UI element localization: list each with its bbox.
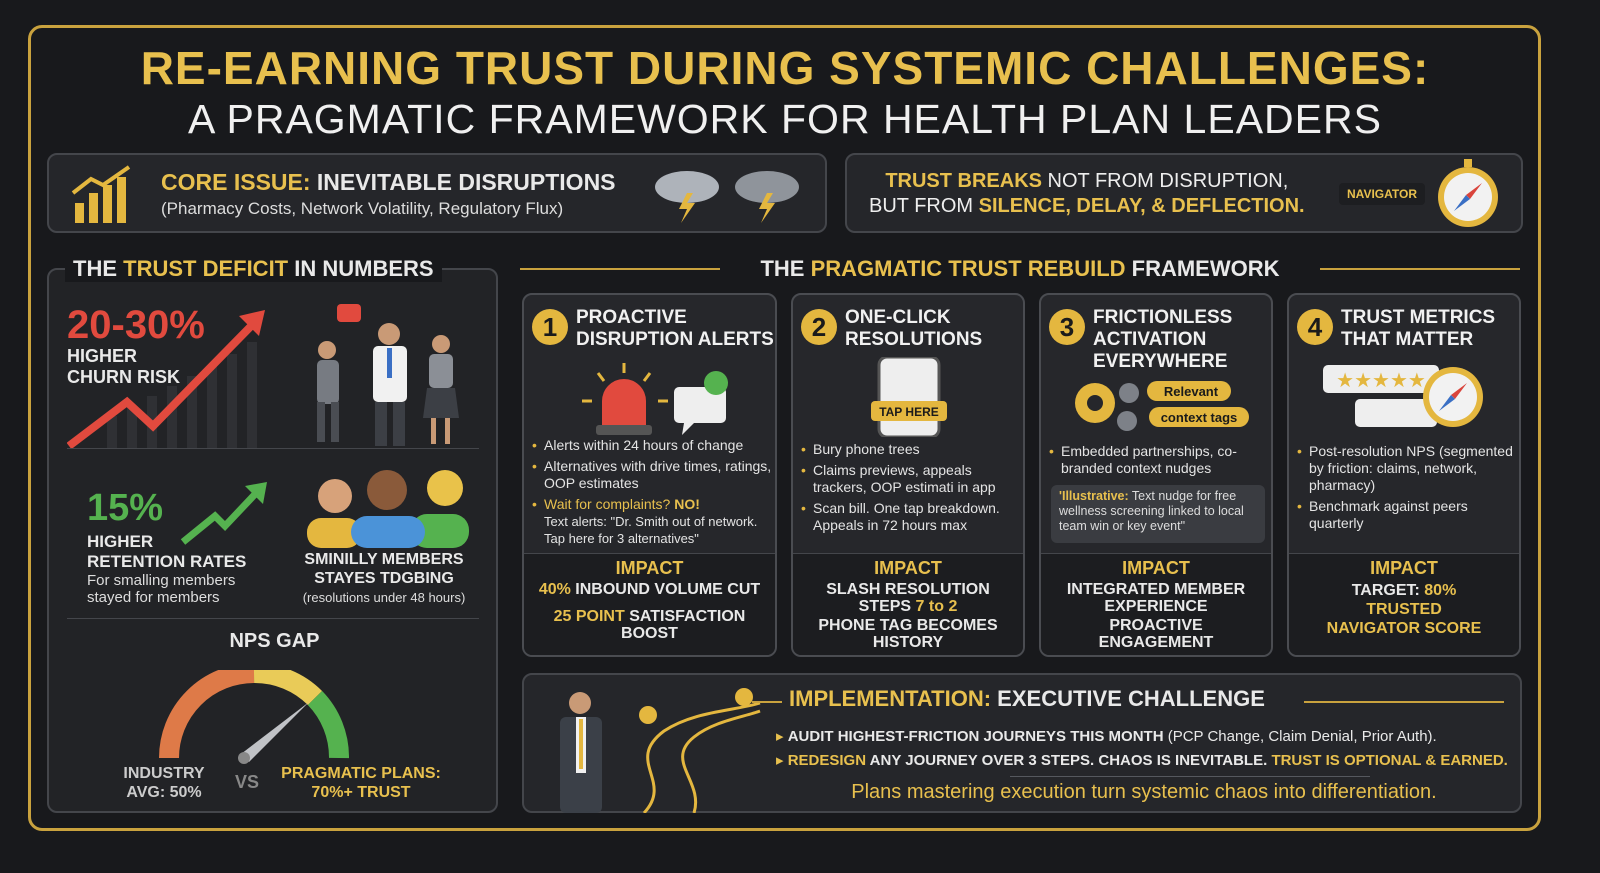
card 4: Benchmark against peers quarterly [1309,498,1468,531]
icon: gears and tags [1075,381,1249,431]
churn stat: CHURN RISK [67,367,180,387]
panel: trust breaks: NAVIGATOR [1347,187,1417,201]
icon: bar chart up [72,165,130,223]
card 3: Embedded partnerships, co-branded context nudges [1061,443,1237,476]
impact 2: SLASH RESOLUTION [826,581,990,598]
icon: executive with road [560,688,760,813]
card 1: Alternatives with drive times, ratings, OOP estimates [544,458,771,491]
impact 2 [793,553,1023,663]
retention stat [87,487,246,606]
panel: trust deficit: PRAGMATIC PLANS: [281,765,441,782]
panel: trust deficit: AVG: 50% [126,784,202,801]
card 1: DISRUPTION ALERTS [576,329,774,350]
icon: stars and compass [1323,365,1483,427]
card 2: Scan bill. One tap breakdown. Appeals in 72 hours max [813,500,1000,533]
panel: implementation: Plans mastering execution turn systemic chaos into differentiation. [851,781,1437,803]
card 2: Bury phone trees [813,441,920,457]
churn stat [67,303,205,387]
impact 4: NAVIGATOR SCORE [1327,620,1481,637]
retention stat: For smalling members [87,572,235,589]
gauge: NPS gap: NPS GAP [229,630,320,652]
churn stat: 20-30% [67,303,205,347]
icon: phone tap here [871,357,947,437]
title: A PRAGMATIC FRAMEWORK FOR HEALTH PLAN LEADERS [188,96,1382,142]
card 4: 4 [1308,312,1322,342]
panel: trust deficit: STAYES TDGBING [314,570,454,587]
impact 4: TRUSTED [1366,601,1442,618]
impact 3: ENGAGEMENT [1099,634,1213,651]
card 2: ONE-CLICK [845,307,951,328]
impact 3: INTEGRATED MEMBER [1067,581,1245,598]
impact 4: IMPACT [1370,558,1438,578]
panel: implementation: ▸ AUDIT HIGHEST-FRICTION JOURNEYS THIS MONTH (PCP Change, Claim Denial, Prior Auth). [776,728,1437,745]
heading: THE TRUST DEFICIT IN NUMBERS [73,256,434,281]
impact 3: PROACTIVE [1109,617,1203,634]
heading: framework: THE PRAGMATIC TRUST REBUILD FRAMEWORK [760,256,1280,281]
panel: trust deficit: SMINILLY MEMBERS [304,551,464,568]
retention stat: HIGHER [87,532,153,551]
icon: siren and message [582,363,728,435]
callout: illustrative [1051,485,1265,543]
card 3 [1039,293,1273,657]
impact 1: IMPACT [616,558,683,578]
card 2: RESOLUTIONS [845,329,982,350]
card 3: EVERYWHERE [1093,351,1227,372]
impact 1: BOOST [621,625,678,642]
card 1 [522,293,777,657]
impact 4: TARGET: 80% [1352,582,1456,599]
icon: gears and tags: context tags [1161,410,1237,425]
card 3: 3 [1060,312,1074,342]
card 1: Alerts within 24 hours of change [544,437,743,453]
impact 4 [1289,553,1519,663]
churn stat: HIGHER [67,346,137,366]
panel: trust deficit: 70%+ TRUST [311,784,411,801]
icon: stars and compass: ★★★★★ [1336,370,1426,392]
panel: implementation: ▸ REDESIGN ANY JOURNEY OVER 3 STEPS. CHAOS IS INEVITABLE. TRUST IS OPTIONAL & EARNED. [776,752,1508,769]
card 1: 1 [543,312,557,342]
title: RE-EARNING TRUST DURING SYSTEMIC CHALLENGES: [141,42,1429,94]
icon: people walking [317,304,459,446]
card 2 [791,293,1025,657]
impact 1: 40% INBOUND VOLUME CUT [539,581,760,598]
icon: smiling members [307,470,469,548]
impact 3 [1041,553,1271,663]
panel: trust breaks: BUT FROM SILENCE, DELAY, & DEFLECTION. [869,195,1305,217]
icon: phone tap here: TAP HERE [879,405,939,419]
impact 1 [524,553,775,663]
card 2: 2 [812,312,826,342]
card 1: Wait for complaints? NO! [544,496,700,512]
panel: trust deficit: INDUSTRY [123,765,205,782]
icon: compass [1438,159,1498,227]
impact 2: HISTORY [873,634,943,651]
callout: illustrative: 'Illustrative: Text nudge for free wellness screening linked to local team win or key event" [1059,489,1244,533]
panel: trust deficit: (resolutions under 48 hours) [303,590,465,605]
card 4 [1287,293,1521,657]
panel: core issue: CORE ISSUE: INEVITABLE DISRUPTIONS [161,169,616,195]
card 3: FRICTIONLESS [1093,307,1232,328]
retention stat: 15% [87,487,163,529]
card 3: ACTIVATION [1093,329,1206,350]
retention stat: RETENTION RATES [87,552,246,571]
panel: trust deficit: VS [235,772,259,792]
impact 2: STEPS 7 to 2 [859,598,957,615]
impact 1: 25 POINT SATISFACTION [554,608,745,625]
card 1: PROACTIVE [576,307,687,328]
card 4: Post-resolution NPS (segmented by friction: claims, network, pharmacy) [1309,443,1513,493]
impact 3: IMPACT [1122,558,1190,578]
card 2: Claims previews, appeals trackers, OOP estimati in app [813,462,996,495]
retention stat: stayed for members [87,589,220,606]
panel: core issue: (Pharmacy Costs, Network Volatility, Regulatory Flux) [161,199,563,218]
impact 3: EXPERIENCE [1104,598,1208,615]
title [141,42,1429,142]
icon: storm clouds [655,171,799,223]
card 4: THAT MATTER [1341,329,1473,350]
panel: trust breaks [845,153,1523,233]
card 1: Text alerts: "Dr. Smith out of network. Tap here for 3 alternatives" [544,514,757,546]
impact 2: PHONE TAG BECOMES [818,617,998,634]
panel: core issue [47,153,827,233]
panel: implementation [522,673,1522,813]
card 4: TRUST METRICS [1341,307,1495,328]
impact 2: IMPACT [874,558,942,578]
icon: gears and tags: Relevant [1164,384,1219,399]
panel: trust breaks: TRUST BREAKS NOT FROM DISRUPTION, [885,170,1288,192]
panel: implementation: IMPLEMENTATION: EXECUTIVE CHALLENGE [789,686,1265,711]
panel: trust deficit [47,268,498,813]
icon: green arrow [180,482,267,545]
chart: red arrow [67,310,265,450]
